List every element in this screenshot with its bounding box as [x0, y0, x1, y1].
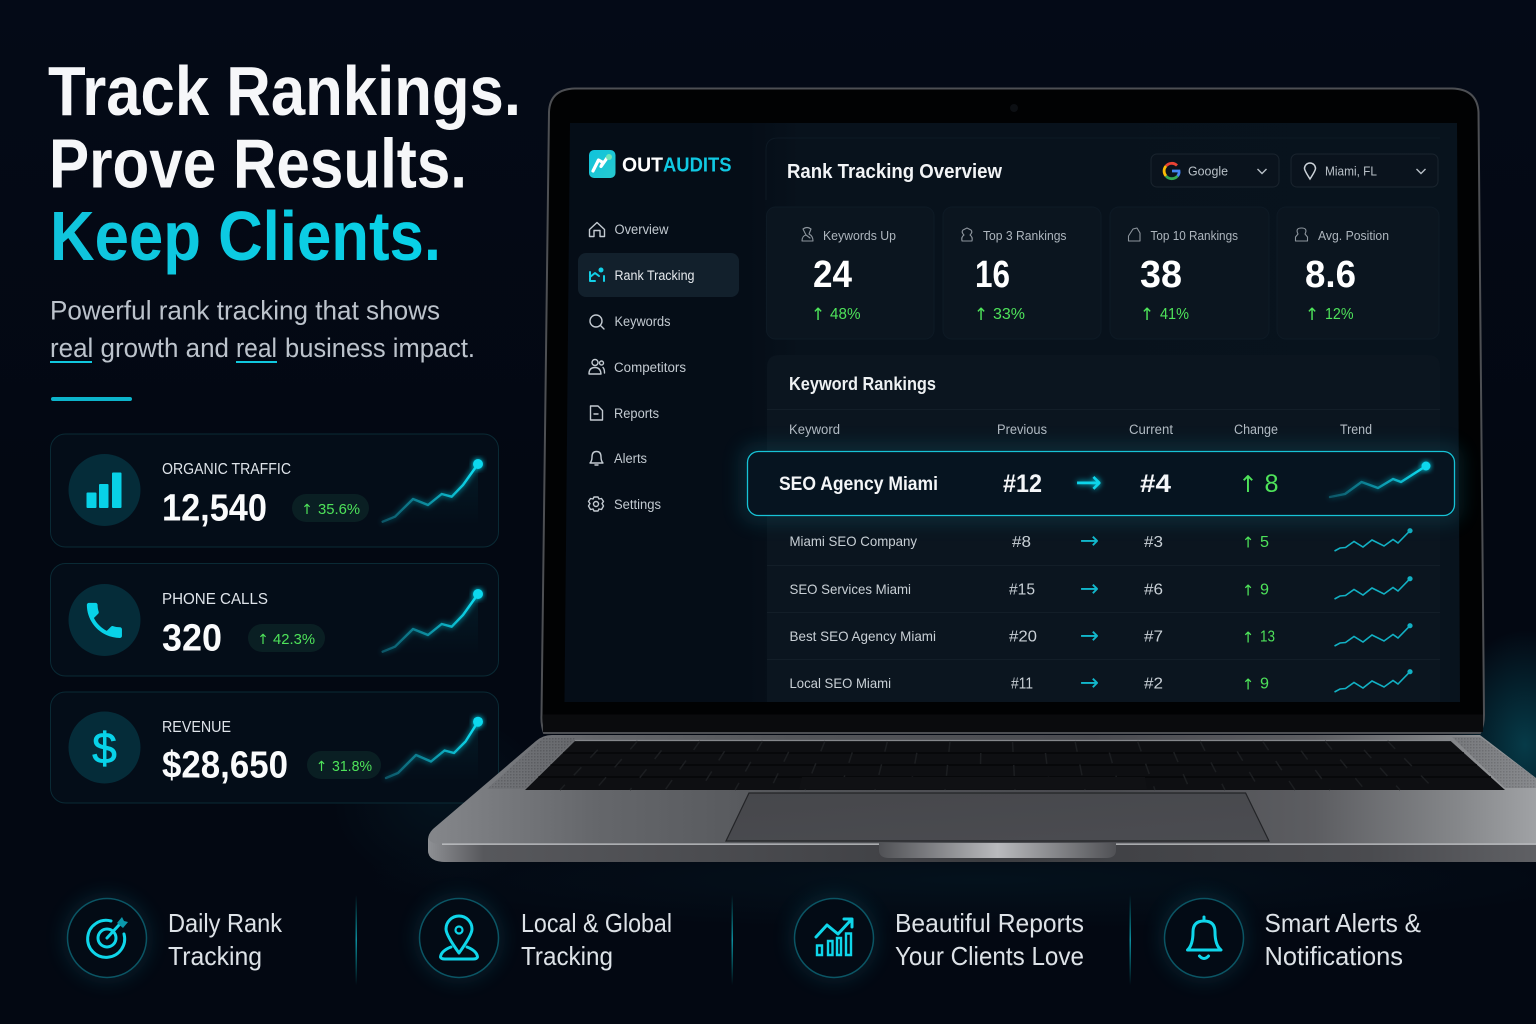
kpi card: top 3: 33% — [993, 306, 1025, 323]
laptop — [428, 88, 1536, 862]
nav: keywords: Keywords — [614, 314, 671, 329]
feature: smart alerts: Smart Alerts & — [1264, 908, 1421, 938]
row: seo services miami — [790, 576, 1413, 602]
feature: smart alerts: Notifications — [1264, 941, 1403, 971]
kpi card: top 3 — [943, 207, 1101, 339]
kpi card: avg position: ↑ — [1305, 305, 1319, 325]
front edge — [428, 838, 1536, 862]
hinge — [543, 714, 1483, 732]
feature: beautiful reports — [788, 892, 1084, 984]
nav: settings — [588, 497, 661, 512]
dropdown: google: Google — [1188, 164, 1228, 178]
icon — [1296, 228, 1308, 241]
row: miami seo company: 5 — [1260, 534, 1269, 551]
icon: rising chart — [816, 919, 852, 955]
keyword rankings table — [767, 355, 1440, 702]
screen — [564, 123, 1460, 702]
icon: phone — [68, 584, 140, 656]
webcam — [1010, 104, 1018, 112]
kpi card: keywords up: 48% — [830, 306, 860, 323]
change pill — [292, 494, 369, 522]
row: local seo miami: 9 — [1260, 676, 1269, 692]
kpi card: keywords up — [766, 207, 934, 339]
value: 320 — [162, 618, 222, 660]
kpi card: avg position: 12% — [1325, 306, 1354, 323]
stat card: phone calls — [50, 564, 498, 676]
row: seo services miami: #6 — [1144, 582, 1163, 598]
kpi card: keywords up: ↑ — [811, 305, 825, 325]
subtitle: Powerful rank tracking that shows — [50, 296, 440, 326]
feature: local and global tracking: Tracking — [521, 941, 613, 971]
nav: keywords — [590, 314, 671, 329]
kpi card: top 10: ↑ — [1140, 305, 1154, 325]
laptop base — [428, 735, 1536, 862]
logo: AUDITS — [663, 154, 732, 176]
kpi card: top 10 — [1110, 207, 1269, 339]
accent divider — [51, 397, 132, 401]
keyboard — [525, 740, 1505, 790]
kpi card: keywords up: Keywords Up — [823, 228, 896, 243]
feature: smart alerts — [1158, 892, 1421, 984]
icon: dollar: $ — [92, 724, 117, 773]
kpi card: top 3: 16 — [975, 254, 1010, 296]
dropdown: location — [1291, 154, 1438, 187]
stat card: revenue — [50, 692, 498, 803]
title: Keep Clients. — [50, 197, 441, 275]
icon: target — [88, 917, 128, 957]
row: miami seo company: ↑ — [1242, 534, 1254, 552]
label: PHONE CALLS — [162, 591, 268, 608]
highlighted row: seo agency miami: #4 — [1140, 470, 1171, 498]
kpi card: top 3: Top 3 Rankings — [983, 228, 1067, 243]
kpi card: keywords up: 24 — [813, 254, 852, 296]
table header — [789, 422, 1372, 437]
row: best seo agency miami — [790, 623, 1413, 649]
feature: daily rank tracking — [61, 892, 283, 984]
change pill: ↑ — [257, 632, 269, 648]
row: seo services miami: 9 — [1260, 582, 1269, 598]
laptop lid — [541, 88, 1484, 733]
row: best seo agency miami: Best SEO Agency Miami — [790, 628, 936, 644]
dropdown: location: Miami, FL — [1325, 164, 1377, 178]
kpi card: top 10: Top 10 Rankings — [1150, 228, 1238, 243]
feature: daily rank tracking: Tracking — [168, 941, 262, 971]
subtitle: real growth and — [50, 333, 229, 363]
change pill: 31.8% — [332, 758, 372, 775]
icon: map pin — [440, 916, 478, 959]
row: miami seo company: #8 — [1012, 534, 1031, 551]
label: ORGANIC TRAFFIC — [162, 461, 291, 478]
kpi card: avg position — [1277, 207, 1439, 339]
row: seo services miami: → — [1080, 576, 1099, 602]
nav: reports — [590, 406, 659, 421]
highlighted row: seo agency miami: → — [1075, 463, 1102, 501]
dropdown: google — [1151, 154, 1279, 187]
nav: alerts: Alerts — [614, 451, 647, 466]
table header: Change — [1234, 422, 1278, 437]
speaker grilles — [487, 738, 575, 789]
row: best seo agency miami: ↑ — [1242, 628, 1254, 646]
change pill: ↑ — [316, 759, 327, 775]
feature: local and global tracking — [413, 892, 672, 984]
nav: overview — [590, 222, 669, 237]
icon: pin — [1304, 163, 1316, 179]
sparkline — [383, 459, 483, 525]
icon — [802, 228, 813, 241]
change pill — [307, 751, 381, 779]
table header: Previous — [997, 422, 1047, 437]
row: local seo miami — [790, 669, 1413, 696]
feature: beautiful reports: Your Clients Love — [895, 941, 1084, 971]
row: seo services miami: SEO Services Miami — [790, 581, 911, 597]
subtitle: real — [236, 333, 277, 363]
highlighted row: seo agency miami: 8 — [1264, 470, 1278, 498]
row: seo services miami: #15 — [1009, 582, 1035, 598]
nav: competitors: Competitors — [614, 360, 686, 375]
sparkline — [386, 717, 483, 781]
table title: Keyword Rankings — [789, 374, 936, 394]
row: miami seo company — [790, 528, 1413, 554]
main panel header — [766, 138, 1440, 200]
logo — [589, 150, 732, 178]
trackpad — [726, 793, 1269, 841]
kpi card: top 10: 38 — [1140, 254, 1182, 296]
feature: daily rank tracking: Daily Rank — [168, 908, 283, 938]
row: best seo agency miami: #7 — [1144, 628, 1163, 646]
icon — [1128, 228, 1140, 241]
sparkline — [383, 589, 483, 655]
icon: google g — [1164, 163, 1179, 179]
change pill: ↑ — [301, 502, 313, 518]
value: 12,540 — [162, 488, 267, 530]
row: best seo agency miami: 13 — [1260, 628, 1275, 646]
row: local seo miami: #11 — [1011, 676, 1033, 692]
nav: rank tracking (active) — [578, 253, 739, 297]
kpi card: top 3: ↑ — [974, 305, 988, 325]
row: miami seo company: → — [1080, 528, 1099, 554]
row: local seo miami: Local SEO Miami — [790, 675, 891, 691]
change pill — [248, 624, 325, 652]
table header: Keyword — [789, 422, 840, 437]
subtitle: business impact. — [285, 333, 475, 363]
table header: Current — [1129, 422, 1173, 437]
logo: OUT — [622, 154, 663, 176]
row: local seo miami: → — [1080, 670, 1099, 696]
front notch — [879, 843, 1116, 858]
row: local seo miami: #2 — [1144, 676, 1163, 692]
label: REVENUE — [162, 719, 231, 736]
value: $28,650 — [162, 744, 288, 786]
nav: settings: Settings — [614, 497, 661, 512]
sparkline — [1330, 462, 1430, 497]
row: best seo agency miami: #20 — [1009, 628, 1037, 646]
title: Prove Results. — [49, 124, 467, 202]
highlighted row: seo agency miami — [738, 442, 1464, 525]
title: Track Rankings. — [48, 52, 521, 130]
icon: dollar — [68, 712, 140, 784]
kpi card: avg position: 8.6 — [1305, 254, 1356, 296]
nav: reports: Reports — [614, 406, 659, 421]
icon — [962, 228, 972, 241]
subtitle — [50, 296, 475, 363]
row: best seo agency miami: → — [1080, 623, 1099, 649]
change pill: 42.3% — [273, 631, 315, 648]
highlighted row: seo agency miami: ↑ — [1238, 472, 1258, 498]
nav: overview: Overview — [614, 222, 669, 237]
sidebar — [578, 150, 739, 512]
highlighted row: seo agency miami: SEO Agency Miami — [779, 473, 938, 495]
nav: rank tracking (active): Rank Tracking — [614, 268, 694, 283]
feature: local and global tracking: Local & Global — [521, 908, 672, 938]
stat card: organic traffic — [50, 434, 498, 547]
title — [48, 52, 521, 275]
kpi card: avg position: Avg. Position — [1318, 228, 1389, 243]
feature: beautiful reports: Beautiful Reports — [895, 908, 1084, 938]
icon: bell — [1188, 917, 1221, 958]
row: miami seo company: #3 — [1144, 534, 1163, 551]
main panel header: Rank Tracking Overview — [787, 161, 1002, 183]
kpi card: top 10: 41% — [1160, 306, 1189, 323]
icon: bar chart — [68, 454, 140, 526]
highlighted row: seo agency miami: #12 — [1003, 470, 1042, 498]
change pill: 35.6% — [318, 501, 360, 518]
nav: alerts — [590, 451, 647, 466]
row: miami seo company: Miami SEO Company — [790, 533, 917, 549]
row: seo services miami: ↑ — [1242, 582, 1254, 600]
row: local seo miami: ↑ — [1242, 676, 1254, 694]
table header: Trend — [1340, 422, 1372, 437]
